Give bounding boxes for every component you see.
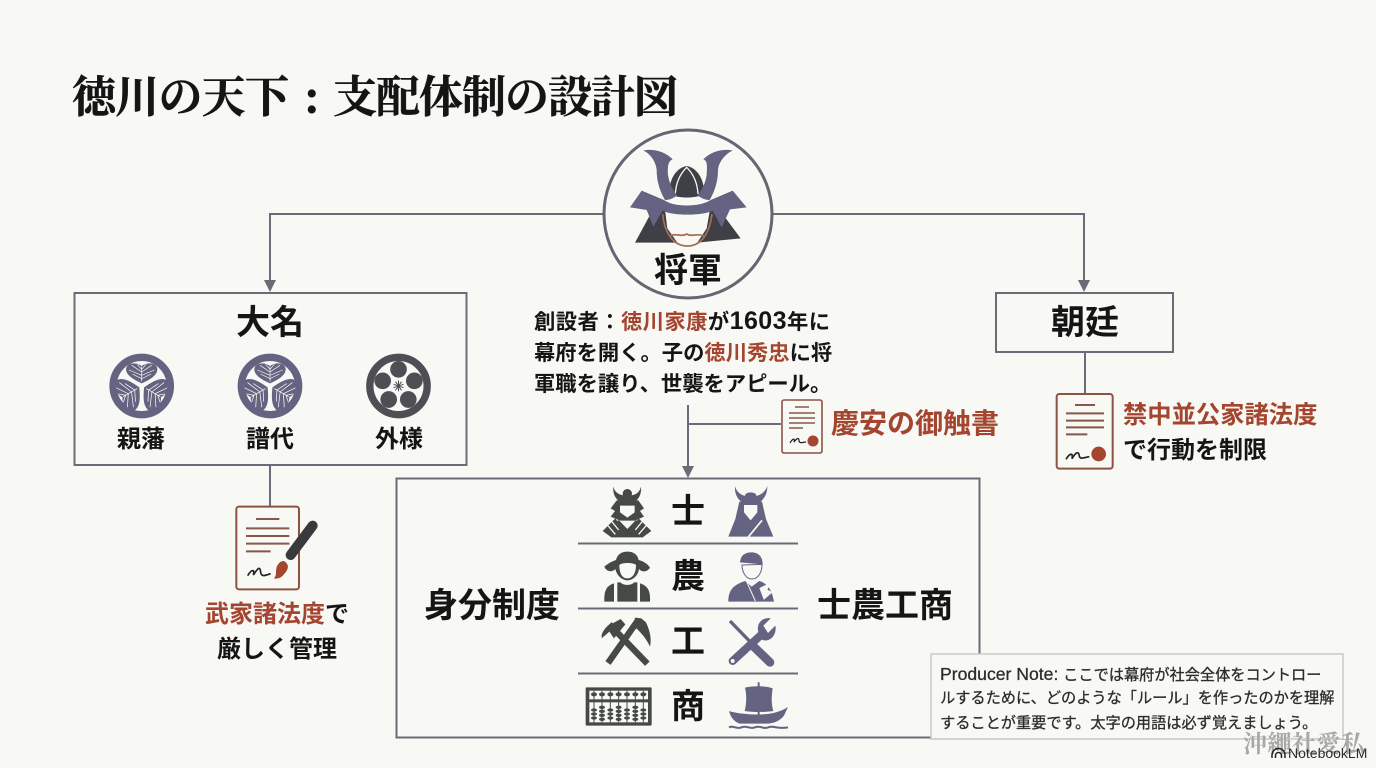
icon: tozama crest	[370, 357, 427, 415]
callout: producer note	[931, 654, 1343, 739]
connector: shogun to status system	[682, 405, 781, 478]
text: founder description	[534, 307, 832, 396]
callout: producer note: Producer Note: ここでは幕府が社会全体をコントロー	[940, 664, 1321, 684]
text: strict control: 厳しく管理	[217, 636, 337, 663]
icon: wrench and screwdriver	[730, 618, 776, 663]
heading: status system: 身分制度	[424, 587, 560, 625]
class: samurai: 士	[671, 493, 705, 531]
connector: shogun to daimyo	[264, 214, 604, 292]
text: keian ofuregaki: 慶安の御触書	[831, 408, 999, 439]
callout: producer note: することが重要です。太字の用語は必ず覚えましょう。	[940, 715, 1317, 732]
icon: abacus	[586, 687, 652, 726]
icon: noble warrior	[728, 486, 773, 537]
text: founder description: 軍職を譲り、世襲をアピール。	[534, 372, 831, 396]
callout: producer note: ルするために、どのような「ルール」を作ったのかを理解	[940, 690, 1334, 707]
class: artisan: 工	[671, 623, 705, 661]
title	[72, 61, 678, 125]
text: kinchu narabini kuge shohatto: 禁中並公家諸法度	[1123, 402, 1317, 429]
text: founder description: 創設者：徳川家康が1603年に	[534, 307, 830, 335]
shogun emblem	[604, 130, 772, 298]
icon: kabuto helmet	[630, 150, 747, 246]
icon: trading ship	[729, 682, 788, 728]
label: shinpan: 親藩	[117, 426, 165, 453]
logo: NotebookLM: NotebookLM	[1288, 745, 1367, 761]
class: farmer: 農	[671, 558, 705, 596]
icon: artisan with headband	[728, 552, 774, 602]
icon: keian document	[782, 400, 822, 453]
label: fudai: 譜代	[246, 426, 294, 453]
connector: shogun to imperial court	[772, 214, 1090, 292]
title: :	[304, 68, 320, 124]
text: restrict actions: で行動を制限	[1123, 437, 1267, 464]
icon: armored samurai	[603, 487, 651, 537]
text: founder description: 幕府を開く。子の徳川秀忠に将	[534, 341, 832, 365]
icon: buke shohatto document with brush	[236, 507, 313, 589]
connector: daimyo to buke laws	[269, 465, 271, 506]
connector: court to law	[1084, 352, 1086, 394]
heading: shi no ko sho: 士農工商	[817, 587, 953, 625]
heading: daimyo: 大名	[236, 304, 304, 342]
title: 支配体制の設計図	[333, 61, 678, 125]
icon: farmer with hat	[604, 552, 650, 602]
text: buke shohatto: 武家諸法度で	[205, 601, 349, 628]
panel: imperial court: 朝廷	[1051, 304, 1119, 342]
icon: crossed hammers	[602, 618, 651, 664]
icon: shinpan crest	[111, 357, 172, 415]
row dividers	[578, 544, 798, 674]
label: tozama: 外様	[375, 426, 423, 453]
title: 徳川の天下	[72, 61, 290, 125]
panel: status system	[396, 478, 980, 738]
icon: fudai crest	[239, 357, 301, 415]
icon: kinchu document	[1057, 394, 1113, 469]
class: merchant: 商	[671, 688, 705, 726]
panel: daimyo	[74, 293, 466, 465]
watermark: stamp text: 沖繩社愛私	[1243, 724, 1367, 759]
label: shogun: 将軍	[654, 252, 722, 290]
panel: imperial court	[996, 293, 1173, 352]
